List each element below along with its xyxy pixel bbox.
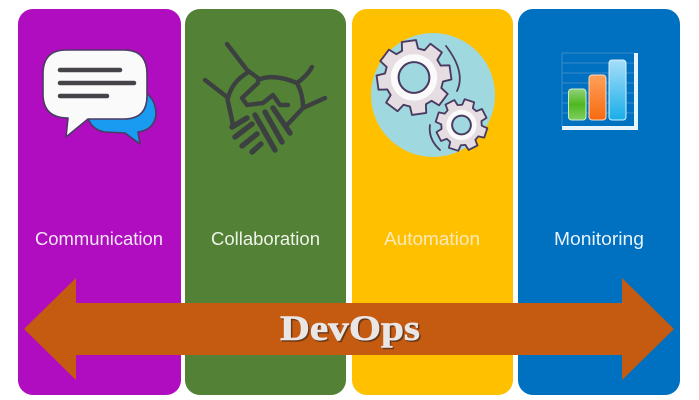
panel: monitoring xyxy=(518,9,680,395)
title: DevOps: DevOps xyxy=(282,310,422,350)
double-headed arrow xyxy=(24,278,674,380)
panel: collaboration xyxy=(185,9,346,395)
label: Monitoring: Monitoring xyxy=(554,229,644,249)
motion arcs xyxy=(430,46,460,150)
icon: handshake xyxy=(205,44,325,152)
panel: automation xyxy=(352,9,513,395)
label: Collaboration: Collaboration xyxy=(211,229,320,249)
small gear xyxy=(429,93,494,157)
icon: bar chart xyxy=(562,53,638,130)
large gear xyxy=(372,36,456,119)
icon: chat bubbles xyxy=(43,50,156,144)
panel: communication xyxy=(18,9,181,395)
label: Communication: Communication xyxy=(35,229,163,249)
label: Automation: Automation xyxy=(384,229,480,249)
icon: gears xyxy=(371,33,495,157)
title: DevOps: DevOps xyxy=(280,308,420,348)
